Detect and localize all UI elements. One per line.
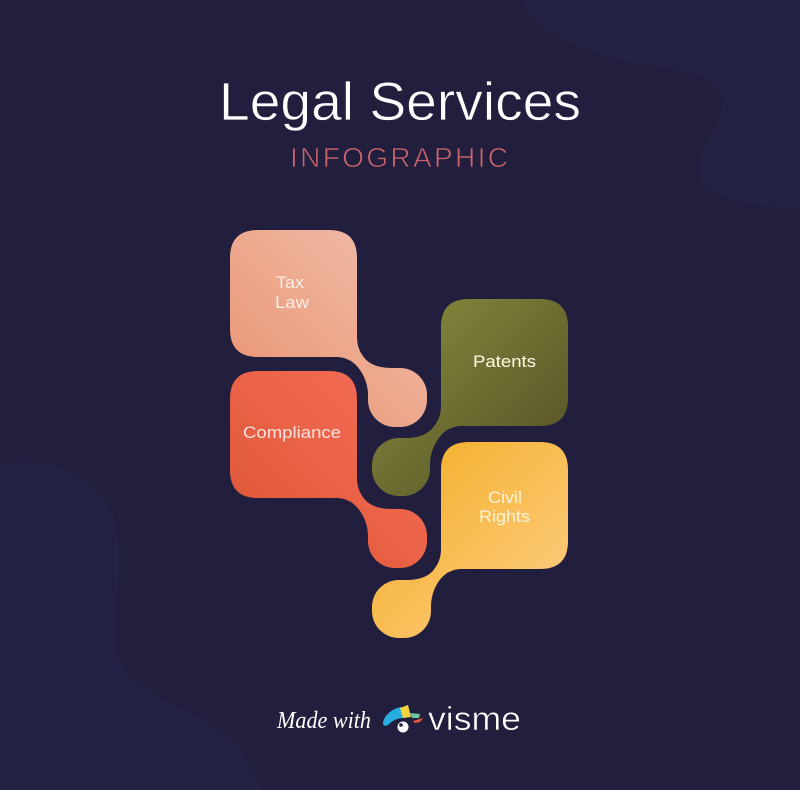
label: tax: Tax: [276, 273, 305, 292]
panel: tax law: [230, 230, 427, 427]
panel: civil rights: [372, 442, 568, 638]
icon: visme logo: [383, 705, 423, 732]
label: patents: Patents: [473, 352, 536, 371]
label: rights: Rights: [479, 507, 530, 526]
subtitle: INFOGRAPHIC: [290, 142, 508, 173]
panel: patents: [372, 299, 568, 496]
panel: compliance: [230, 371, 427, 568]
label: civil: Civil: [488, 488, 522, 507]
label: law: Law: [275, 293, 310, 312]
made with script text: Made with: [276, 708, 371, 734]
visme wordmark: visme: [428, 700, 521, 737]
label: compliance: Compliance: [243, 423, 341, 442]
background blob: top right: [522, 0, 800, 207]
footer: made with visme: [276, 700, 521, 737]
background blob: bottom left: [0, 461, 262, 790]
title: Legal Services: [219, 72, 581, 132]
